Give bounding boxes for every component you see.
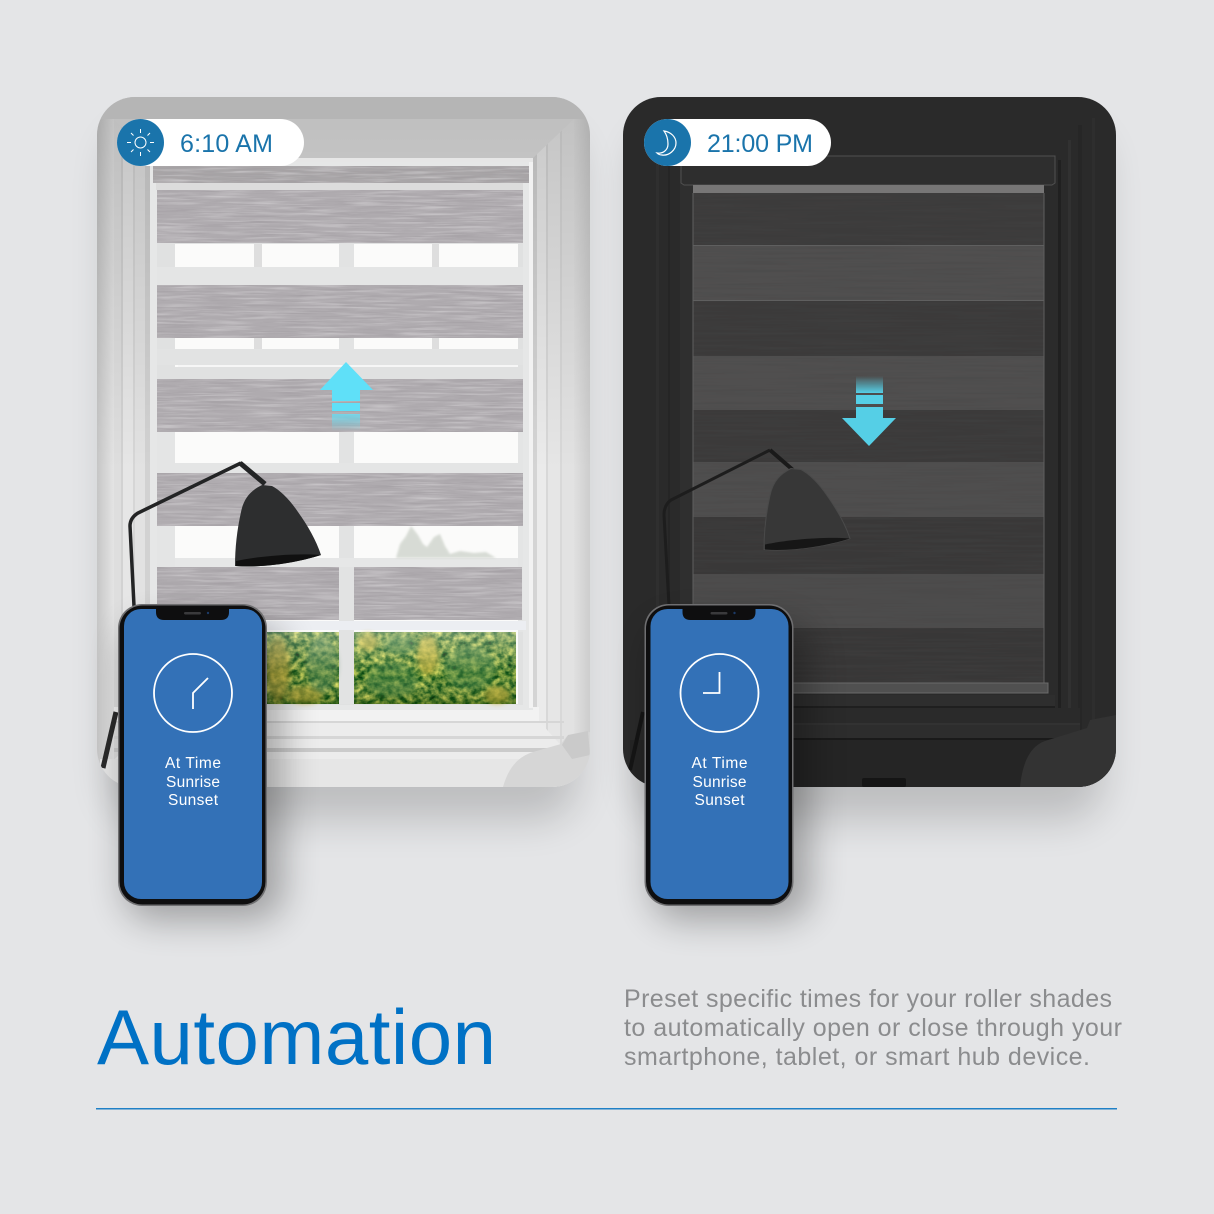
icon: sun <box>117 119 164 166</box>
description: smartphone, tablet, or smart hub device. <box>624 1043 1090 1071</box>
dark wall and trim <box>623 97 1116 787</box>
shade bands <box>693 193 1044 683</box>
shade band 3 <box>157 379 523 432</box>
phone menu text <box>692 755 748 809</box>
phone shadow: right <box>652 625 810 920</box>
description: to automatically open or close through your <box>624 1014 1122 1042</box>
yellow foliage <box>358 633 510 704</box>
green foliage <box>366 635 496 698</box>
top strip <box>97 97 590 119</box>
arrow down <box>842 376 896 446</box>
time label: 6:10 AM <box>180 130 273 158</box>
icon: moon <box>644 119 691 166</box>
infographic canvas <box>92 97 1122 1110</box>
shade band 5 right <box>354 567 522 620</box>
panel shadow: right <box>636 130 1103 820</box>
phone menu text <box>165 755 221 809</box>
icon: clock at 6:10 <box>154 654 232 732</box>
notch <box>682 608 756 620</box>
panel: evening window at 21:00 PM <box>623 97 1116 787</box>
phone menu text: Sunset <box>168 792 219 809</box>
lamp <box>630 450 850 770</box>
phone menu text: Sunrise <box>166 774 220 791</box>
haze <box>354 632 516 704</box>
phone menu text: Sunrise <box>692 774 746 791</box>
top light strip <box>693 185 1044 193</box>
cassette <box>681 156 1055 185</box>
notch <box>156 608 229 620</box>
shade band 2 <box>157 285 523 338</box>
icon: clock at 21:00 <box>680 654 758 732</box>
small object <box>862 778 906 787</box>
forest view right pane <box>354 632 516 704</box>
pillow <box>1020 715 1116 787</box>
screen <box>124 609 262 899</box>
phone shadow: left <box>125 625 283 920</box>
roller cassette <box>153 166 529 183</box>
shade band 1 <box>157 190 523 243</box>
bottom rail <box>794 682 1048 694</box>
green foliage <box>306 637 338 693</box>
title: Automation <box>97 993 496 1081</box>
haze <box>267 632 339 704</box>
window trim <box>97 97 590 787</box>
time pill: 6:10 AM <box>117 119 304 166</box>
phone menu text: At Time <box>165 755 221 772</box>
panel: daytime window at 6:10 AM <box>97 97 590 787</box>
shade band 5 left <box>157 567 339 620</box>
time label: 21:00 PM <box>707 130 813 158</box>
time pill: 21:00 PM <box>644 119 831 166</box>
phone: right <box>644 604 794 906</box>
description: Preset specific times for your roller shades <box>624 985 1112 1013</box>
description <box>624 985 1122 1071</box>
phone menu text: At Time <box>692 755 748 772</box>
panel shadow: left <box>110 130 577 820</box>
arrow up <box>320 362 373 431</box>
yellow foliage <box>266 638 323 704</box>
divider rule <box>96 1108 1117 1110</box>
top light strip <box>156 183 523 190</box>
shade band 4 <box>157 473 523 526</box>
vignette <box>97 97 590 380</box>
lamp <box>103 463 321 768</box>
phone menu text: Sunset <box>694 792 745 809</box>
forest view left pane <box>267 632 340 707</box>
window opening <box>150 158 533 710</box>
phone: left <box>118 604 267 906</box>
bottom rail <box>266 621 526 630</box>
pillow <box>503 731 590 787</box>
screen <box>650 609 788 899</box>
